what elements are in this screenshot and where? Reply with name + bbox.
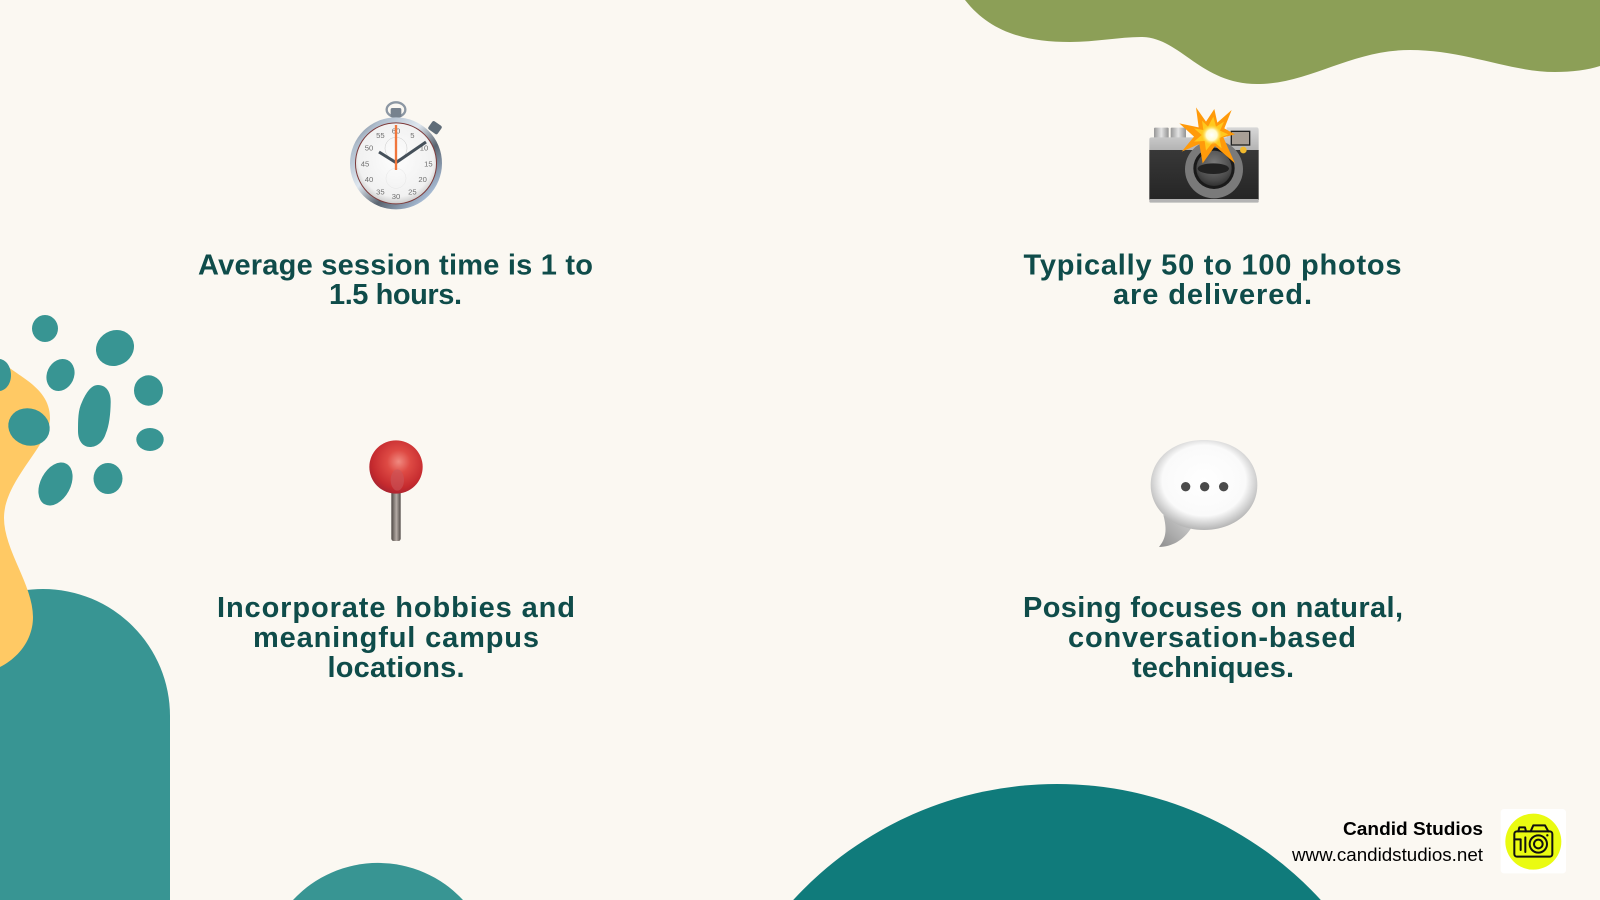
text: posing: Posing focuses on natural, — [1023, 592, 1403, 624]
background shape: large dark teal dome bottom — [793, 784, 1321, 900]
icon: stopwatch — [350, 102, 443, 209]
icon: stopwatch: 40 — [365, 175, 373, 184]
icon: camera with flash — [1149, 107, 1259, 203]
panel: locations — [217, 440, 575, 684]
decorative teal dots cluster — [0, 315, 164, 511]
icon: round red pushpin — [369, 440, 423, 541]
icon: stopwatch: 25 — [408, 187, 417, 196]
icon: stopwatch: 55 — [376, 131, 385, 140]
text: session time — [198, 250, 593, 311]
logo: camera on yellow circle — [1501, 809, 1566, 873]
icon: stopwatch: 30 — [392, 192, 400, 201]
panel: posing — [1023, 440, 1403, 684]
icon: speech bubble with dots — [1151, 440, 1257, 547]
text: photos delivered: Typically 50 to 100 photos — [1024, 250, 1402, 282]
text: session time: 1.5 hours. — [329, 279, 462, 311]
text: posing — [1023, 592, 1403, 684]
text: posing: conversation-based — [1068, 622, 1356, 654]
icon: stopwatch: 5 — [410, 131, 414, 140]
brand website: www.candidstudios.net — [1291, 845, 1483, 865]
icon: stopwatch: 15 — [424, 160, 433, 169]
text: photos delivered: are delivered. — [1113, 279, 1312, 311]
icon: stopwatch: 45 — [361, 160, 369, 169]
background blob: yellow left edge — [0, 359, 50, 667]
icon: stopwatch: 60 — [392, 126, 400, 135]
text: photos delivered — [1024, 250, 1402, 311]
text: locations: Incorporate hobbies and — [217, 592, 575, 624]
text: locations — [217, 592, 575, 684]
footer: brand block — [1291, 809, 1566, 873]
text: locations: locations. — [328, 652, 464, 684]
text: posing: techniques. — [1132, 652, 1294, 684]
background shape: small teal dome bottom — [293, 863, 463, 900]
brand name: Candid Studios — [1343, 819, 1483, 839]
text: session time: Average session time is 1 to — [198, 250, 593, 282]
icon: stopwatch: 35 — [376, 187, 385, 196]
icon: stopwatch: 10 — [420, 143, 428, 152]
icon: stopwatch: 50 — [365, 143, 373, 152]
background shape: teal rounded column bottom left — [0, 589, 170, 900]
background blob: olive wave top right — [965, 0, 1600, 84]
text: locations: meaningful campus — [253, 622, 539, 654]
icon: stopwatch: 20 — [418, 175, 427, 184]
panel: session time — [198, 102, 593, 311]
panel: photos delivered — [1024, 107, 1402, 311]
